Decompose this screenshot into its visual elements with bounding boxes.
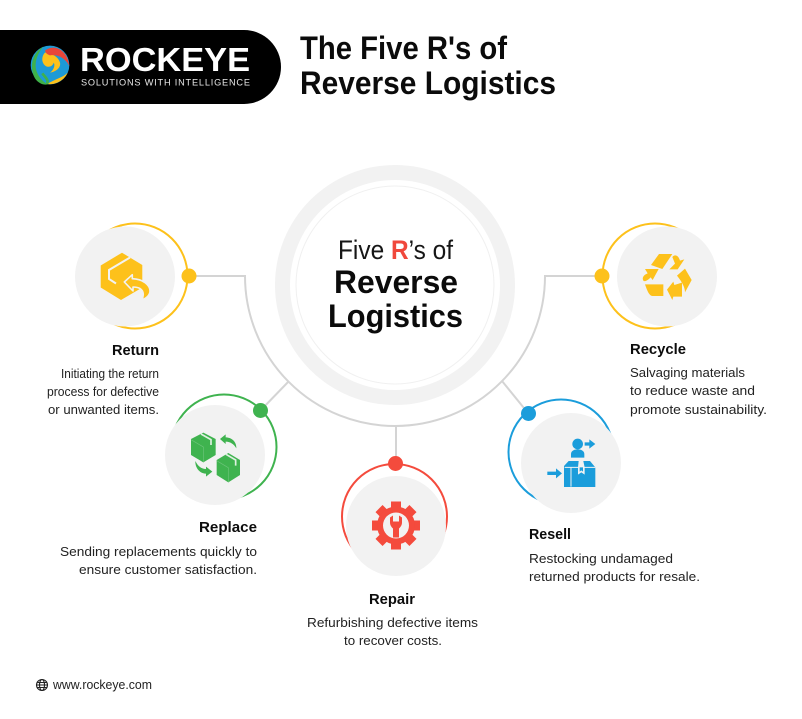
header: logo banner — [0, 30, 281, 104]
text: recycle: Salvaging materials — [630, 365, 745, 380]
hub text: Five R’s of — [338, 235, 453, 265]
title: The Five R's of — [300, 30, 507, 66]
text: replace — [60, 520, 257, 577]
text: replace: Replace — [199, 520, 257, 536]
node: recycle — [594, 224, 717, 328]
text: return: Initiating the return — [61, 366, 159, 381]
node: repair — [342, 456, 447, 576]
text: return: Return — [112, 343, 159, 359]
website url: www.rockeye.com — [52, 678, 152, 692]
text: repair: Refurbishing defective items — [307, 615, 479, 630]
icon: swirl logo — [31, 46, 69, 85]
text: return: process for defective — [47, 384, 159, 399]
connector lines — [189, 276, 602, 464]
node: replace — [165, 394, 276, 505]
text: replace: ensure customer satisfaction. — [79, 562, 257, 577]
text: return — [47, 343, 159, 417]
text: recycle — [630, 342, 767, 417]
icon: return box — [101, 253, 150, 300]
footer: website — [36, 678, 152, 692]
icon: replace boxes — [191, 433, 240, 482]
node: resell — [508, 400, 621, 513]
icon: globe — [36, 680, 48, 690]
title — [300, 30, 556, 101]
icon: gear and wrench — [372, 502, 420, 550]
text: resell — [529, 527, 700, 584]
text: recycle: to reduce waste and — [630, 383, 755, 398]
text: repair — [307, 592, 479, 648]
icon: person and parcel — [547, 439, 595, 487]
text: recycle: promote sustainability. — [630, 402, 767, 417]
text: repair: to recover costs. — [344, 633, 442, 648]
text: resell: returned products for resale. — [529, 569, 700, 584]
central hub circle — [275, 165, 515, 405]
banner background — [0, 30, 281, 104]
text: replace: Sending replacements quickly to — [60, 544, 257, 559]
text: recycle: Recycle — [630, 342, 686, 358]
hub text: Reverse — [334, 264, 458, 300]
text: resell: Resell — [529, 527, 571, 543]
logo wordmark: ROCKEYE — [80, 42, 250, 79]
title: Reverse Logistics — [300, 65, 556, 101]
icon: recycle arrows — [643, 254, 692, 300]
hub text — [328, 235, 463, 334]
text: return: or unwanted items. — [48, 402, 159, 417]
text: resell: Restocking undamaged — [529, 551, 673, 566]
hub text: Logistics — [328, 298, 463, 334]
logo tagline: SOLUTIONS WITH INTELLIGENCE — [81, 78, 250, 88]
text: repair: Repair — [369, 592, 415, 608]
node: return — [75, 224, 196, 328]
